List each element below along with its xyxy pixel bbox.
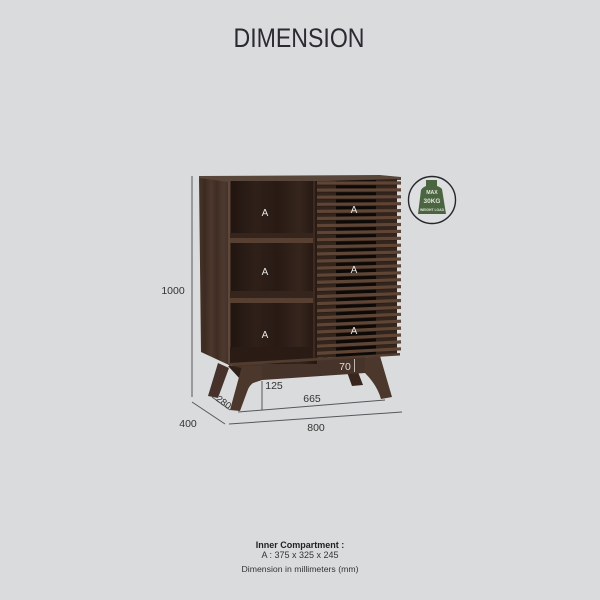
- weight load badge: [408, 176, 456, 224]
- compartment labels left: [262, 208, 269, 341]
- compartment labels left: A: [262, 267, 269, 278]
- back apron piece: [228, 366, 243, 379]
- dimension: inner width 665: 665: [303, 393, 321, 405]
- back left leg: [208, 363, 229, 398]
- dimension: width 800: 800: [307, 422, 325, 434]
- units note: Dimension in millimeters (mm): [242, 565, 359, 574]
- weight load badge: 30KG: [424, 198, 440, 205]
- upper shelf: [230, 233, 314, 243]
- inner compartment size: A : 375 x 325 x 245: [261, 550, 339, 560]
- compartment labels right: [351, 205, 358, 337]
- lower shelf: [230, 291, 314, 303]
- compartment labels right: A: [351, 265, 358, 276]
- door frame edge: [315, 181, 317, 358]
- divider edge: [313, 181, 316, 358]
- weight load badge: WEIGHT LOAD: [420, 208, 445, 212]
- title: DIMENSION: [234, 23, 364, 53]
- back right leg: [347, 372, 363, 386]
- base front strip: [229, 353, 400, 366]
- icon: green weight: [418, 180, 446, 214]
- dimension: apron height 70: [339, 359, 354, 373]
- inner left edge: [228, 181, 230, 365]
- compartment labels right: A: [351, 205, 358, 216]
- dimension: depth 400: [179, 402, 225, 430]
- dimension: width 800: [229, 412, 402, 434]
- compartment floor: [230, 347, 316, 363]
- open compartment: [229, 181, 317, 364]
- slatted door: [315, 179, 401, 358]
- front right leg: [365, 356, 392, 399]
- dimension: height 1000: 1000: [161, 285, 185, 297]
- slat shadows: [316, 185, 397, 348]
- dimension: apron height 70: 70: [339, 361, 351, 373]
- dimension: inner width 665: [238, 393, 385, 412]
- left side panel: [199, 176, 229, 365]
- dark centre gaps: [336, 180, 376, 357]
- cabinet: [199, 175, 401, 411]
- slats: [316, 183, 401, 353]
- dimension: depth 400: 400: [179, 418, 197, 430]
- compartment labels left: A: [262, 330, 269, 341]
- top panel: [199, 175, 401, 182]
- compartment labels left: A: [262, 208, 269, 219]
- front left leg: [230, 366, 263, 411]
- inner compartment heading: Inner Compartment :: [256, 540, 344, 550]
- weight load badge: MAX: [426, 190, 438, 196]
- compartment labels right: A: [351, 326, 358, 337]
- dimension: inner depth 280: 280: [214, 394, 233, 412]
- dimension: leg height 125: 125: [265, 380, 283, 392]
- dimension: leg height 125: [262, 380, 283, 410]
- base apron: [229, 353, 400, 384]
